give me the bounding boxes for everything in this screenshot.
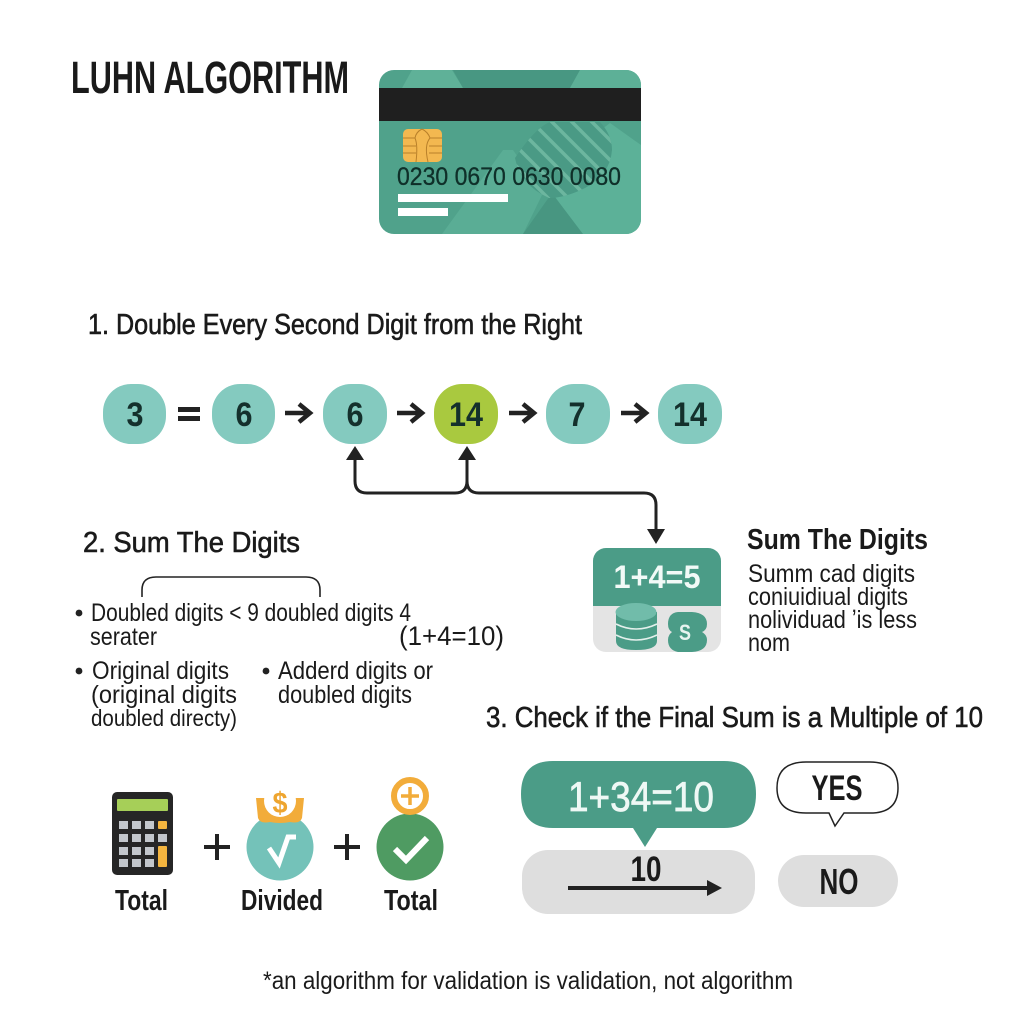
sum description: Summ cad digits: [748, 560, 915, 588]
icon: divided check with coin: $: [272, 787, 288, 820]
equals sign: [178, 407, 200, 421]
step 2 bullet list: [76, 599, 504, 731]
callout: yes: [777, 762, 898, 826]
footnote: *an algorithm for validation is validation, not algorithm: [263, 967, 793, 995]
label: total: Total: [384, 885, 438, 917]
bullet: original digits: doubled directy): [91, 705, 237, 731]
arrow: [397, 404, 422, 422]
bullet: original digits: Original digits: [92, 657, 229, 685]
digit 3: 3: [126, 396, 144, 434]
sum description: coniuidiual digits: [748, 583, 908, 611]
title: LUHN ALGORITHM: [71, 52, 349, 103]
arrow: [509, 404, 534, 422]
digit 6: [323, 384, 387, 444]
digit 14: [658, 384, 722, 444]
heading: sum the digits: Sum The Digits: [747, 524, 928, 556]
sum description: nom: [748, 629, 790, 657]
bracket: [142, 577, 320, 597]
plus sign: [204, 834, 230, 860]
bullet: original digits: (original digits: [91, 681, 237, 709]
digit 3: [103, 384, 166, 444]
digit 6: 6: [346, 396, 364, 434]
digit 14 highlighted: [434, 384, 498, 444]
bullet: added digits: Adderd digits or: [278, 657, 433, 685]
callout: yes: YES: [812, 769, 862, 808]
digit 7: 7: [568, 396, 586, 434]
callout: no: [778, 855, 898, 907]
card text bars: [398, 194, 508, 216]
bullet: original digits: [76, 657, 237, 731]
digit sequence: [103, 384, 722, 444]
icon: dollar badge: S: [679, 620, 691, 645]
bullet: doubled digits: (1+4=10): [399, 621, 504, 651]
digit 14: 14: [673, 396, 707, 434]
arrow: [568, 880, 722, 896]
icon: chip: [403, 129, 442, 162]
heading: step 1: 1. Double Every Second Digit from the Right: [88, 309, 582, 341]
icon: credit card: [379, 70, 641, 234]
digit 6: [212, 384, 275, 444]
heading: step 2: 2. Sum The Digits: [83, 527, 300, 559]
panel: number line: [522, 850, 755, 914]
sum description: nolividuad ʼis less: [748, 606, 917, 634]
sum equation: 1+4=5: [614, 559, 700, 595]
connector arrows: [346, 446, 665, 544]
bullet: doubled digits: [76, 599, 504, 651]
bullet: doubled digits: Doubled digits < 9 doubled digits 4: [91, 599, 411, 627]
panel: number line: 10: [630, 850, 662, 889]
callout: no: NO: [820, 861, 858, 902]
callout: equation: [521, 761, 756, 847]
label: divided: Divided: [241, 885, 323, 917]
bullet: added digits: doubled digits: [278, 681, 412, 709]
bullet: added digits: [263, 657, 433, 709]
digit 7: [546, 384, 610, 444]
sum description: [748, 560, 917, 657]
bullet: doubled digits: serater: [90, 623, 157, 651]
label: total: Total: [115, 885, 168, 917]
arrow: [621, 404, 646, 422]
callout: equation: 1+34=10: [568, 773, 714, 820]
digit 6: 6: [236, 396, 252, 434]
icon: total check with plus: [376, 780, 444, 880]
icon: calculator: [112, 792, 173, 875]
icon: coin stack: [616, 603, 657, 650]
card number: 0230 0670 0630 0080: [397, 163, 621, 191]
digit 14 highlighted: 14: [449, 396, 483, 434]
icon: divided check with coin: [246, 785, 314, 880]
panel: sum result: [593, 548, 721, 652]
plus sign: [334, 834, 360, 860]
arrow: [285, 404, 310, 422]
